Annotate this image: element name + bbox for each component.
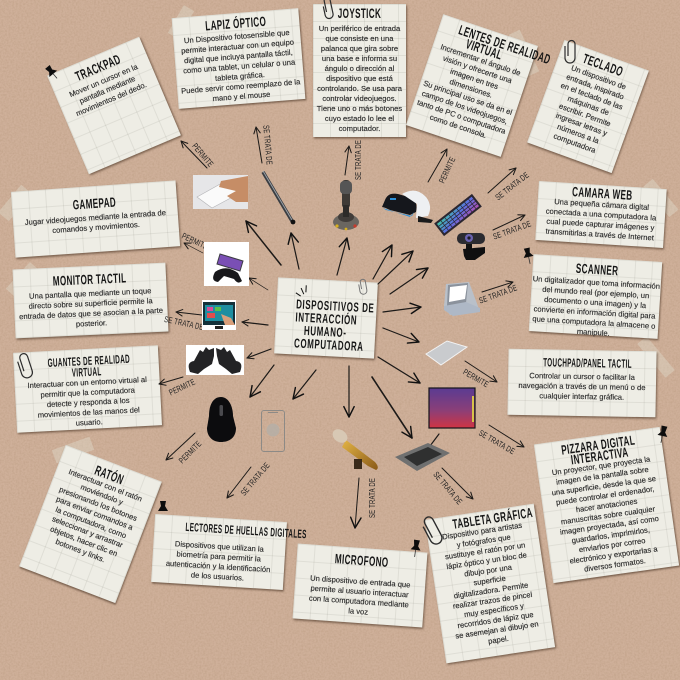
heading: raton: RATÓN [92, 463, 126, 487]
text: guantes: detecte y responda a los [46, 396, 129, 409]
text: pizarra: guardarlos, imprimirlos, [571, 525, 650, 545]
note: gamepad [10, 180, 180, 258]
heading: gamepad: GAMEPAD [72, 195, 116, 213]
connector labels: SE TRATA DE [163, 314, 205, 332]
text: tableta grafica: Dispositivo para artistas [442, 520, 523, 541]
text: teclado: ingresar letras y [554, 111, 608, 138]
text: lapiz optico: digital que incluya pantalla táctil, [184, 47, 293, 65]
connector labels: SE TRATA DE [493, 170, 531, 202]
icon: fingerprint phone [262, 410, 284, 452]
clip: guantes [16, 353, 34, 379]
connector labels: SE TRATA DE [477, 428, 517, 456]
text: pizarra: manuscritas sobre cualquier [560, 504, 655, 526]
icon: webcam [457, 233, 485, 260]
text: pizarra [551, 455, 659, 574]
text: lentes: como de consola. [429, 112, 488, 140]
clip: teclado [565, 40, 575, 63]
text: pizarra: electrónico y exportarlas a [569, 544, 658, 566]
text: tableta grafica: papel. [488, 633, 509, 645]
text: guantes [27, 375, 147, 428]
text: pizarra: imagen proyectada, así como [559, 514, 659, 537]
text: microfono: Un dispositivo de entrada que [310, 573, 411, 589]
text: teclado: computadora [552, 131, 597, 155]
clip: joystick [322, 0, 334, 19]
text: joystick: cuyo estado lo lee el [325, 114, 394, 123]
text: lentes: tanto de PC o computadora [416, 97, 507, 135]
text: teclado: escribir. Permite [557, 101, 612, 128]
text: scanner: convierte en información digital para [533, 304, 655, 320]
text: scanner: que una computadora la almacene o [532, 314, 655, 330]
note: tableta grafica [425, 503, 555, 663]
icon: vr headset [382, 191, 433, 223]
text: raton: objetos, hacer clic en [48, 524, 118, 558]
text: lapiz optico: mano y el mouse [212, 89, 271, 103]
heading: trackpad: TRACKPAD [73, 52, 123, 84]
text: camara web: Una pequeña cámara digital [554, 197, 649, 211]
connector labels: PERMITE [180, 231, 210, 251]
note: camara web [535, 181, 667, 247]
text: joystick: controlar videojuegos. [322, 94, 397, 103]
heading: teclado: TECLADO [580, 51, 625, 79]
text: pizarra: diversos formatos. [583, 556, 646, 574]
text: pizarra: enviarlos por correo [578, 536, 645, 554]
text: monitor tactil: directo sobre su superficie permite la [28, 296, 152, 310]
pin: scanner [522, 247, 535, 265]
text: microfono [309, 573, 411, 616]
note: microfono [293, 543, 427, 627]
title: DISPOSITIVOS DE [296, 296, 375, 316]
text: tableta grafica: realizar trazos de pincel [452, 589, 533, 610]
heading: guantes: VIRTUAL [71, 364, 101, 380]
text: tableta grafica: lápiz óptico y un bloc de [446, 550, 527, 571]
icon: graphics tablet [395, 443, 450, 471]
text: touchpad: navegación a través de un menú o de [518, 381, 646, 392]
text: trackpad [68, 62, 148, 118]
text: scanner [532, 274, 660, 337]
text: tableta grafica: sustituye el ratón por un [444, 540, 526, 561]
text: joystick: dispositivo que está [326, 74, 393, 83]
heading: touchpad: TOUCHPAD/PANEL TACTIL [543, 355, 632, 371]
text: lectores [166, 539, 271, 583]
title [294, 296, 375, 354]
text: monitor tactil: posterior. [75, 318, 107, 328]
connector labels: SE TRATA DE [238, 460, 272, 498]
text: joystick: una base e informa su [322, 54, 397, 63]
heading: pizarra: INTERACTIVA [569, 445, 629, 467]
text: gamepad: comandos y movimientos. [51, 220, 140, 235]
text: lectores: autenticación y la identificación [166, 559, 271, 574]
text: trackpad: pantalla mediante [78, 74, 137, 106]
text: raton: la computadora, como [54, 505, 127, 540]
note: lapiz optico [172, 8, 305, 108]
heading: lectores: LECTORES DE HUELLAS DIGITALES [185, 520, 307, 541]
text: pizarra: imagen de la pantalla sobre [555, 465, 649, 487]
pin: pizarra [656, 425, 669, 444]
note: trackpad [47, 37, 181, 174]
icon: touch panel [426, 341, 467, 365]
connector labels: PERMITE [167, 377, 197, 397]
text: tableta grafica: se asemejan al dibujo en [455, 619, 539, 640]
icon: apple trackpad with hand [193, 175, 248, 209]
icon: gaming controller with phone mount [204, 242, 249, 286]
text: trackpad: movimientos del dedo. [75, 80, 148, 118]
text: tableta grafica: y fotógrafos que [456, 532, 511, 549]
note: touchpad panel tactil [507, 349, 657, 417]
heading: pizarra: PIZZARA DIGITAL [560, 432, 635, 458]
connector labels: SE TRATA DE [477, 282, 519, 306]
text: joystick: Tiene uno o más botones [317, 104, 402, 113]
text: raton: seleccionar y arrastrar [50, 514, 124, 550]
text: touchpad: Controlar un cursor o facilitar la [529, 371, 635, 382]
pin: lectores [158, 501, 168, 511]
text: microfono: permite al usuario interactuar [310, 583, 409, 599]
text: teclado: en el teclado de las [559, 81, 624, 112]
text: camara web [545, 197, 656, 242]
note: teclado [527, 40, 648, 173]
heading: lentes: VIRTUAL [464, 36, 504, 62]
text: tableta grafica: dibujo por una [464, 562, 513, 578]
heading: scanner: SCANNER [575, 260, 618, 278]
text: lentes: visión y ofrecerte una [442, 53, 513, 85]
text: trackpad: Mover un cursor en la [68, 62, 139, 99]
text: lectores: biometría para permitir la [176, 549, 261, 564]
text: joystick: ángulo o dirección al [325, 64, 394, 73]
text: tableta grafica: superficie [473, 573, 506, 587]
icon: optical pen [263, 171, 295, 224]
icon: digital whiteboard [429, 388, 475, 428]
text: tableta grafica [442, 520, 539, 646]
text: raton: moviéndolo y [79, 482, 124, 507]
note: dispositivos central title [274, 277, 378, 359]
text: guantes: movimientos de las manos del [37, 405, 139, 420]
arrows: from center to devices [242, 221, 428, 438]
icon: computer mouse [207, 397, 236, 442]
text: touchpad: cualquier interfaz gráfica. [539, 391, 624, 402]
text: tableta grafica: digitalizadora. Permite [453, 580, 529, 600]
burst marks: central note [296, 285, 306, 296]
text: pizarra: hacer anotaciones [575, 497, 637, 514]
note: pizarra digital interactiva [533, 427, 679, 583]
text: lentes [416, 42, 522, 140]
icon: golden microphone [330, 426, 378, 470]
heading: monitor tactil: MONITOR TACTIL [52, 270, 126, 288]
connector labels: PERMITE [177, 439, 203, 465]
heading: microfono: MICROFONO [334, 551, 389, 569]
note: guantes de realidad virtual [13, 345, 161, 433]
text: pizarra: Un proyector, que proyecta la [551, 455, 650, 477]
text: joystick: que consiste en una [326, 34, 393, 43]
heading: guantes: GUANTES DE REALIDAD [47, 352, 130, 370]
text: joystick: computador. [339, 124, 380, 133]
text: tableta grafica: recorridos de lápiz que [457, 609, 534, 630]
note: joystick [313, 4, 406, 137]
note: lectores de huellas digitales [151, 514, 287, 590]
connector labels: SE TRATA DE [261, 125, 275, 165]
title: COMPUTADORA [294, 335, 364, 354]
text: teclado: Un dispositivo de [569, 63, 627, 91]
text: lectores: Dispositivos que utilizan la [175, 539, 264, 554]
text: teclado [552, 63, 627, 155]
text: touchpad [518, 371, 646, 402]
text: camara web: transmitirlas a través de Internet [545, 226, 654, 242]
connector labels: SE TRATA DE [367, 478, 377, 518]
text: gamepad [24, 208, 166, 235]
heading: camara web: CAMARA WEB [572, 184, 633, 202]
text: microfono: con la computadora mediante [309, 593, 409, 609]
heading: joystick: JOYSTICK [338, 6, 381, 21]
text: lentes: Incrementar el ángulo de [439, 42, 522, 77]
icon: rgb keyboard [434, 194, 482, 236]
text: raton: botones y links. [54, 537, 106, 564]
note: raton [19, 445, 161, 603]
icon: scanner [444, 282, 480, 316]
text: lapiz optico: como una tablet, un celular o una [183, 57, 295, 75]
text: gamepad: Jugar videojuegos mediante la entrada de [24, 208, 166, 227]
text: joystick [316, 24, 402, 133]
text: raton [48, 467, 143, 564]
text: lapiz optico: Puede servir como reemplazo de la [181, 77, 301, 95]
text: guantes: permitir que la computadora [40, 386, 135, 399]
clip: tableta [420, 515, 444, 546]
icon: touch monitor [202, 300, 236, 330]
text: scanner: del mundo real (por ejemplo, un [541, 284, 649, 300]
text: teclado: entrada, inspirado [565, 72, 625, 101]
heading: tableta grafica: TABLETA GRÁFICA [452, 505, 534, 531]
text: scanner: Un digitalizador que toma información [532, 274, 660, 290]
text: raton: presionando los botones [57, 485, 138, 523]
text: lapiz optico: permite interactuar con un equipo [181, 37, 294, 55]
text: joystick: palanca que gira sobre [321, 44, 398, 53]
text: microfono: la voz [348, 606, 368, 616]
text: raton: para enviar comandos a [54, 494, 134, 532]
icon: joystick [333, 180, 359, 230]
text: monitor tactil [18, 286, 163, 328]
heading: lentes: LENTES DE REALIDAD [457, 22, 553, 67]
note: scanner [528, 254, 662, 338]
connector labels: SE TRATA DE [431, 469, 465, 507]
text: lectores: de los usuarios. [191, 570, 244, 583]
text: tableta grafica: muy específicos y [463, 601, 524, 619]
text: monitor tactil: entrada de datos que se asocian a la parte [18, 305, 163, 321]
connector labels: SE TRATA DE [353, 140, 363, 180]
heading: guantes [47, 352, 130, 380]
icon: vr gloves [186, 345, 244, 375]
title: HUMANO- [304, 323, 347, 340]
text: lentes: Su principal uso se da en el [422, 78, 513, 116]
text: pizarra: una superficie, desde la que se [551, 474, 656, 497]
text: teclado: máquinas de [566, 94, 610, 117]
text: scanner: manipule. [576, 326, 610, 337]
connector labels: PERMITE [437, 155, 457, 185]
connector labels: SE TRATA DE [491, 218, 533, 242]
text: camara web: cual puede capturar imágenes y [546, 216, 655, 232]
arrows: from devices to notes [159, 127, 525, 528]
heading: lapiz optico: LAPIZ ÓPTICO [205, 13, 267, 33]
title: INTERACCIÓN [295, 309, 358, 328]
connector labels: PERMITE [190, 141, 216, 169]
text: lentes: imagen en tres [449, 66, 499, 91]
text: raton: Interactuar con el ratón [67, 467, 143, 503]
text: joystick: Un periférico de entrada [319, 24, 400, 33]
text: lentes: dimensiones. [448, 76, 494, 99]
clip: central [358, 279, 367, 295]
text: guantes: Interactuar con un entorno virtual al [27, 375, 147, 390]
text: joystick: controlando. Se usa para [317, 84, 402, 93]
text: lapiz optico: Un Dispositivo fotosensible que [184, 27, 290, 45]
text: lapiz optico [181, 27, 301, 103]
text: monitor tactil: Una pantalla que mediante un toque [28, 286, 151, 300]
text: pizarra: puede controlar el ordenador, [555, 484, 654, 507]
text: guantes: usuario. [75, 417, 102, 428]
text: lentes: campo de los videojuegos, [421, 88, 509, 125]
pin: trackpad [44, 64, 61, 82]
note: monitor tactil [12, 262, 168, 338]
text: teclado: números a la [555, 122, 600, 145]
text: scanner: documento o una imagen) y la [543, 294, 646, 310]
text: camara web: conectada a una computadora la [546, 206, 656, 222]
pin: microfono [410, 539, 422, 558]
connector labels: PERMITE [461, 367, 491, 389]
note: lentes de realidad virtual [406, 14, 538, 156]
text: lapiz optico: tableta gráfica. [215, 70, 265, 82]
